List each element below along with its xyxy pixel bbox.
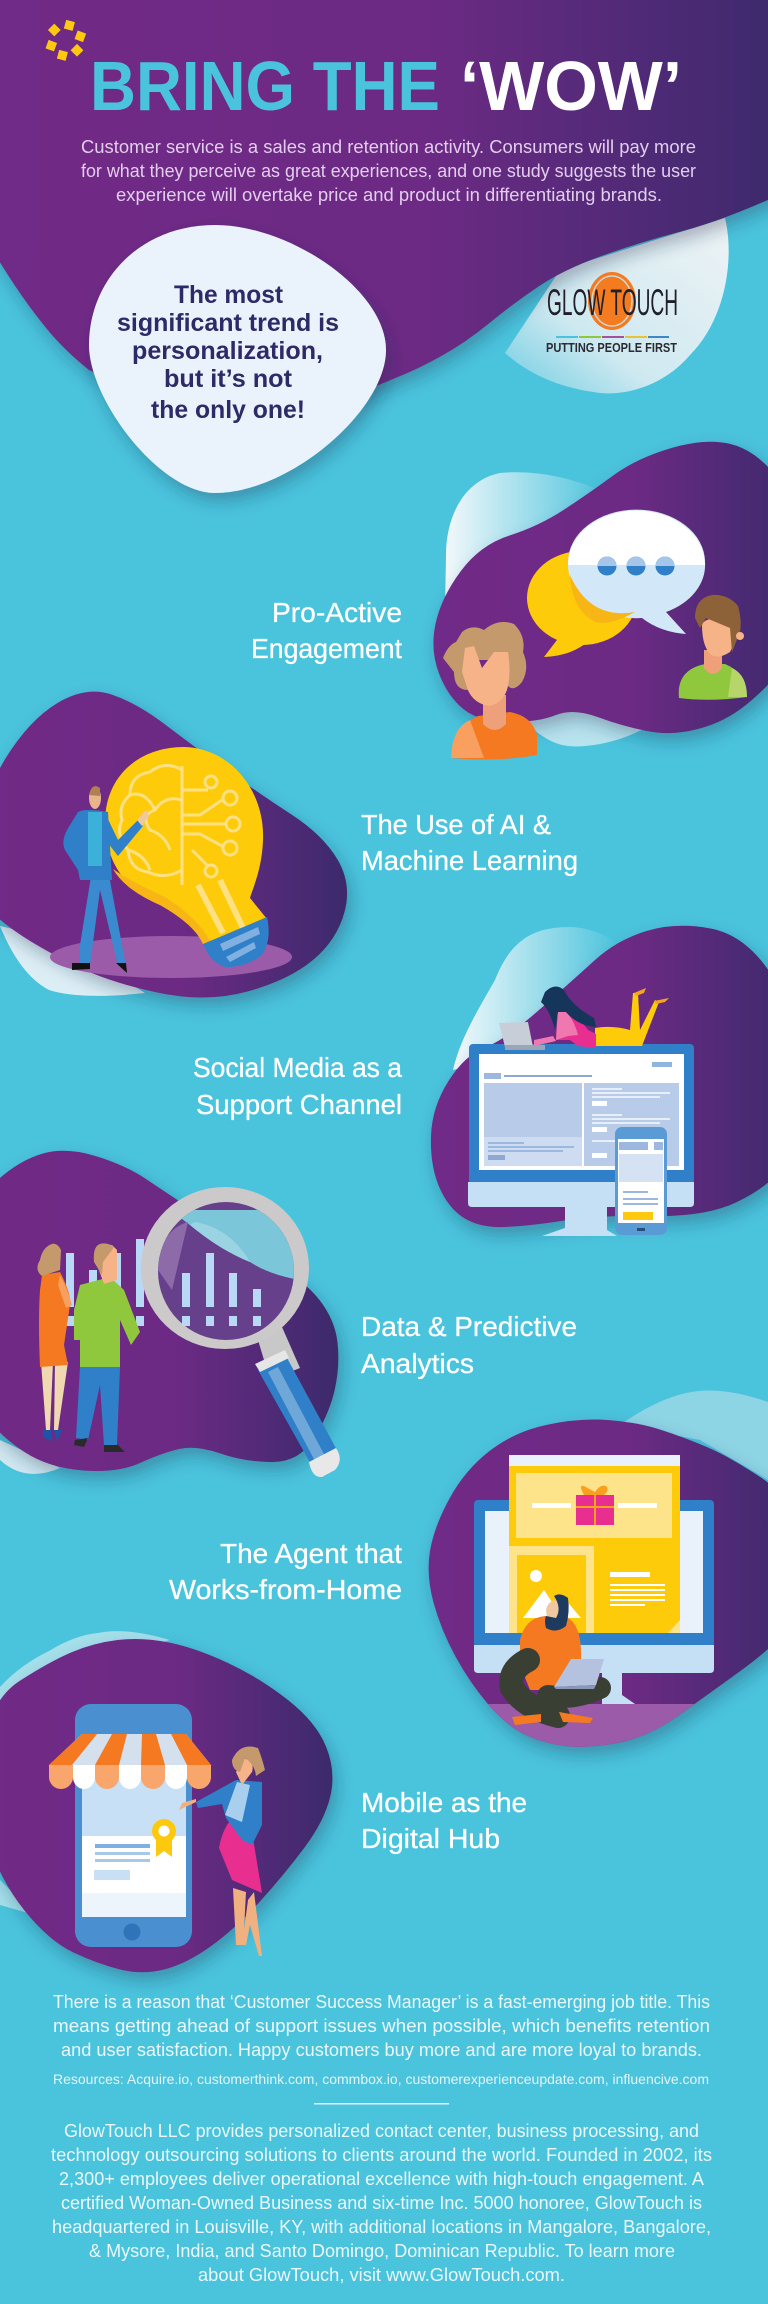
- callout text: personalization,: [132, 337, 323, 365]
- floor ellipse: [50, 936, 292, 978]
- icon: white speech bubble: [568, 510, 705, 634]
- callout: personalization trend: [89, 225, 386, 493]
- heading: [361, 1787, 527, 1854]
- company description: 2,300+ employees deliver operational excellence with high-touch engagement. A: [59, 2169, 704, 2189]
- logo backdrop blob: [505, 218, 729, 393]
- floor: [488, 1704, 694, 1747]
- icon: magnifying glass: [141, 1187, 340, 1477]
- closing paragraph: There is a reason that ‘Customer Success Manager’ is a fast-emerging job title. This: [53, 1992, 710, 2012]
- backdrop blob top: [445, 472, 610, 610]
- heading: Support Channel: [196, 1089, 402, 1120]
- company description: technology outsourcing solutions to clients around the world. Founded in 2002, its: [51, 2145, 712, 2165]
- purple blob: [431, 926, 768, 1227]
- backdrop blob bottom: [520, 700, 650, 746]
- callout blob: [89, 225, 386, 493]
- backdrop blob: [620, 1390, 768, 1480]
- purple blob: [429, 1420, 768, 1747]
- callout text: the only one!: [151, 396, 305, 424]
- illustration: phone: [615, 1127, 667, 1235]
- illustration: woman on laptop: [499, 986, 669, 1050]
- heading: Data & Predictive: [361, 1311, 577, 1342]
- callout text: significant trend is: [117, 309, 339, 337]
- intro paragraph: Customer service is a sales and retention activity. Consumers will pay more: [81, 137, 696, 157]
- title: [90, 47, 682, 125]
- icon: man in suit: [63, 786, 149, 973]
- heading: [193, 1052, 402, 1120]
- intro paragraph: for what they perceive as great experiences, and one study suggests the user: [81, 161, 696, 181]
- heading: Digital Hub: [361, 1823, 500, 1854]
- title: ‘WOW’: [460, 47, 682, 125]
- company description: GlowTouch LLC provides personalized contact center, business processing, and: [64, 2121, 699, 2141]
- illustration: woman in orange dress: [37, 1244, 72, 1441]
- illustration: woman in pink skirt: [179, 1746, 265, 1956]
- intro paragraph: [81, 137, 696, 205]
- resources line: Resources: Acquire.io, customerthink.com, commbox.io, customerexperienceupdate.com, influencive.com: [53, 2071, 709, 2087]
- icon: gift box: [576, 1486, 614, 1525]
- heading: Mobile as the: [361, 1787, 527, 1818]
- panel: pro-active engagement: [251, 442, 768, 759]
- panel: AI and machine learning: [0, 692, 578, 998]
- backdrop blob: [0, 926, 145, 996]
- bar chart: [66, 1239, 144, 1326]
- illustration: monitor: [474, 1500, 714, 1704]
- company description: headquartered in Louisville, KY, with additional locations in Mangalore, Bangalore,: [52, 2217, 711, 2237]
- heading: [169, 1538, 402, 1605]
- purple blob: [0, 1639, 332, 1972]
- heading: [361, 809, 578, 876]
- heading: Social Media as a: [193, 1052, 402, 1083]
- icon: person left: [443, 622, 537, 759]
- header purple blob: [0, 0, 768, 420]
- closing paragraph: and user satisfaction. Happy customers buy more and are more loyal to brands.: [61, 2040, 702, 2060]
- company description: certified Woman-Owned Business and six-time Inc. 5000 honoree, GlowTouch is: [61, 2193, 702, 2213]
- panel: mobile as digital hub: [0, 1631, 527, 1972]
- title: BRING THE: [90, 47, 440, 125]
- company description: about GlowTouch, visit www.GlowTouch.com.: [198, 2265, 565, 2285]
- company description: & Mysore, India, and Santo Domingo, Dominican Republic. To learn more: [89, 2241, 675, 2261]
- purple blob: [0, 1151, 338, 1471]
- icon: awning: [49, 1734, 211, 1789]
- backdrop blob: [0, 1440, 60, 1474]
- icon: person right: [679, 595, 747, 700]
- heading: Analytics: [361, 1348, 474, 1379]
- logo: GlowTouch: [546, 272, 678, 355]
- callout text: [117, 281, 339, 424]
- icon: yellow sparkle: [46, 20, 86, 61]
- callout text: The most: [174, 281, 284, 309]
- heading: The Agent that: [220, 1538, 402, 1569]
- backdrop blob: [0, 1631, 170, 1915]
- illustration: man with laptop: [511, 1594, 604, 1725]
- panel: data and predictive analytics: [0, 1151, 577, 1477]
- closing paragraph: means getting ahead of support issues when possible, which benefits retention: [53, 2016, 710, 2036]
- heading: [251, 597, 402, 664]
- callout text: but it’s not: [164, 365, 293, 393]
- logo: GlowTouch: PUTTING PEOPLE FIRST: [546, 341, 677, 355]
- closing paragraph: [53, 1992, 710, 2060]
- icon: badge: [152, 1819, 176, 1857]
- purple blob: [0, 692, 347, 998]
- intro paragraph: experience will overtake price and product in differentiating brands.: [116, 185, 662, 205]
- panel: work-from-home agent: [169, 1390, 768, 1754]
- panel: social media support: [193, 926, 768, 1236]
- heading: Machine Learning: [361, 845, 578, 876]
- illustration: man in green sweater: [74, 1243, 140, 1452]
- icon: yellow speech bubble: [527, 551, 637, 657]
- illustration: email document: [509, 1455, 680, 1633]
- heading: Works-from-Home: [169, 1574, 402, 1605]
- purple blob: [433, 442, 768, 733]
- illustration: smartphone storefront: [49, 1704, 211, 1947]
- heading: Pro-Active: [272, 597, 402, 628]
- illustration: desktop monitor: [468, 1044, 694, 1236]
- icon: light bulb: [105, 747, 269, 967]
- heading: Engagement: [251, 633, 402, 664]
- company description: [51, 2121, 712, 2285]
- heading: [361, 1311, 577, 1379]
- heading: The Use of AI &: [361, 809, 551, 840]
- backdrop blob: [453, 927, 620, 1070]
